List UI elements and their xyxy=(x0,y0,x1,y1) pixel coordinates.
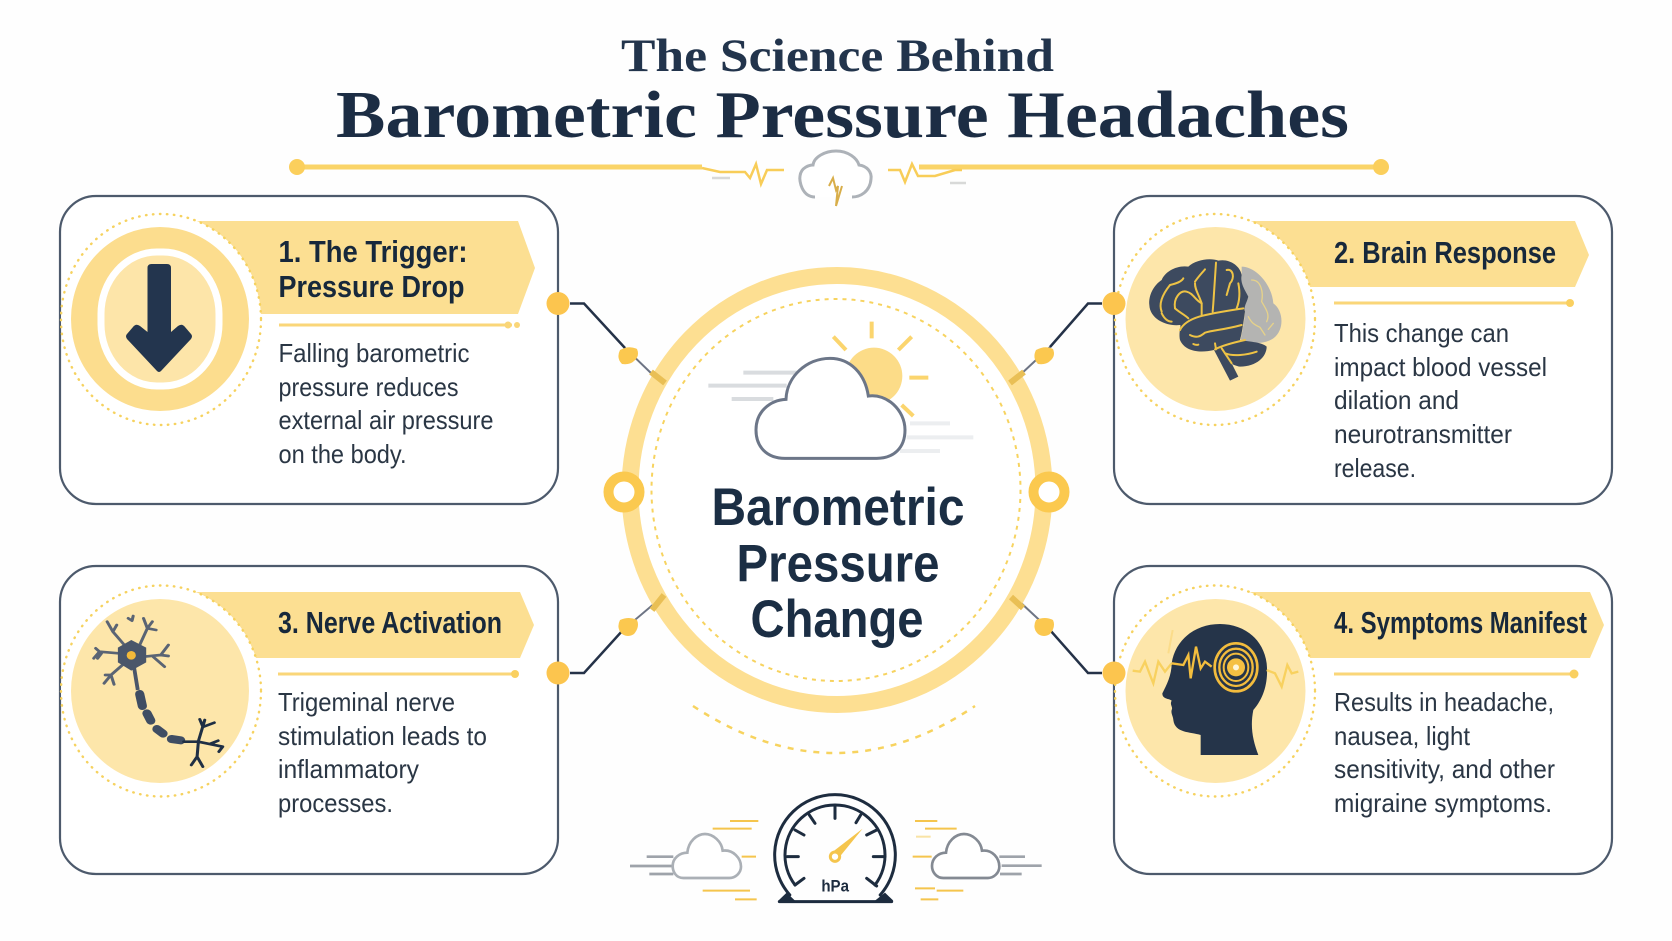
connector dot xyxy=(546,662,570,684)
heading banner xyxy=(1240,221,1589,287)
rule xyxy=(279,322,520,328)
rule xyxy=(1334,299,1574,307)
panel: 2 brain response xyxy=(1102,196,1612,504)
centre label xyxy=(712,478,964,649)
body text: processes. xyxy=(278,788,393,818)
centre label: Change xyxy=(750,590,924,649)
title line 2: Barometric Pressure Headaches xyxy=(336,78,1349,152)
icon: sun and cloud xyxy=(708,322,973,458)
body text: sensitivity, and other xyxy=(1334,754,1555,784)
title xyxy=(336,30,1349,152)
card outline xyxy=(60,196,558,504)
body text: inflammatory xyxy=(278,754,419,784)
connector dot xyxy=(1102,662,1126,684)
body text: external air pressure xyxy=(278,405,494,435)
icon: down arrow xyxy=(61,214,261,425)
body text xyxy=(1334,687,1555,818)
left ring node xyxy=(608,476,640,508)
panel: 4 symptoms manifest xyxy=(1102,566,1612,874)
body text xyxy=(1334,318,1547,483)
body text: This change can xyxy=(1334,318,1509,348)
gauge dial xyxy=(775,795,895,902)
body text: Falling barometric xyxy=(278,338,470,368)
centre label: Barometric xyxy=(712,478,964,537)
panel: 1 the trigger xyxy=(60,196,570,504)
body text: release. xyxy=(1334,453,1416,483)
body text: on the body. xyxy=(278,439,406,469)
body text: nausea, light xyxy=(1334,721,1471,751)
heading banner xyxy=(1240,592,1604,658)
panel: 3 nerve activation xyxy=(60,566,570,874)
centre label: Pressure xyxy=(736,534,940,594)
connector lines to central ring xyxy=(570,304,1102,673)
heading banner xyxy=(185,221,535,314)
inner dotted ring xyxy=(652,299,1020,681)
connector dot xyxy=(546,292,570,315)
outer ring xyxy=(630,276,1044,704)
icon: head with pain signal xyxy=(1115,586,1315,796)
heading: 1. The Trigger: xyxy=(278,234,468,269)
connector dot xyxy=(1102,292,1126,315)
title divider with cloud xyxy=(289,151,1389,206)
ring connection tabs xyxy=(651,372,1024,610)
body text: Results in headache, xyxy=(1334,687,1554,717)
gauge needle xyxy=(830,829,863,861)
card outline xyxy=(1114,566,1612,874)
body text: pressure reduces xyxy=(278,372,458,402)
left cloud xyxy=(630,834,741,878)
body text: migraine symptoms. xyxy=(1334,788,1552,818)
card outline xyxy=(60,566,558,874)
body text: stimulation leads to xyxy=(278,721,487,751)
unit label: hPa xyxy=(821,877,850,896)
icon: barometer gauge with clouds xyxy=(630,795,1042,902)
heading: 3. Nerve Activation xyxy=(278,605,502,640)
panel: 1 the trigger: Pressure Drop xyxy=(278,269,464,304)
rule xyxy=(278,670,519,678)
rule xyxy=(1334,670,1578,678)
body text: impact blood vessel xyxy=(1334,352,1547,382)
heading banner xyxy=(185,592,534,658)
body text xyxy=(278,338,494,469)
card outline xyxy=(1114,196,1612,504)
heading: 4. Symptoms Manifest xyxy=(1334,605,1587,640)
body text xyxy=(278,687,487,818)
connector blobs xyxy=(618,347,1054,636)
panel: central ring xyxy=(608,276,1064,704)
wind dashes xyxy=(703,821,963,899)
title line 1: The Science Behind xyxy=(621,30,1054,82)
body text: dilation and xyxy=(1334,385,1459,415)
dashed arc under ring xyxy=(693,706,975,753)
right cloud xyxy=(932,834,1042,878)
body text: neurotransmitter xyxy=(1334,419,1512,449)
heading: 2. Brain Response xyxy=(1334,235,1556,270)
body text: Trigeminal nerve xyxy=(278,687,455,717)
icon: neuron xyxy=(61,586,261,796)
right ring node xyxy=(1034,476,1064,508)
icon: brain xyxy=(1115,214,1315,425)
gauge feet xyxy=(778,893,893,901)
